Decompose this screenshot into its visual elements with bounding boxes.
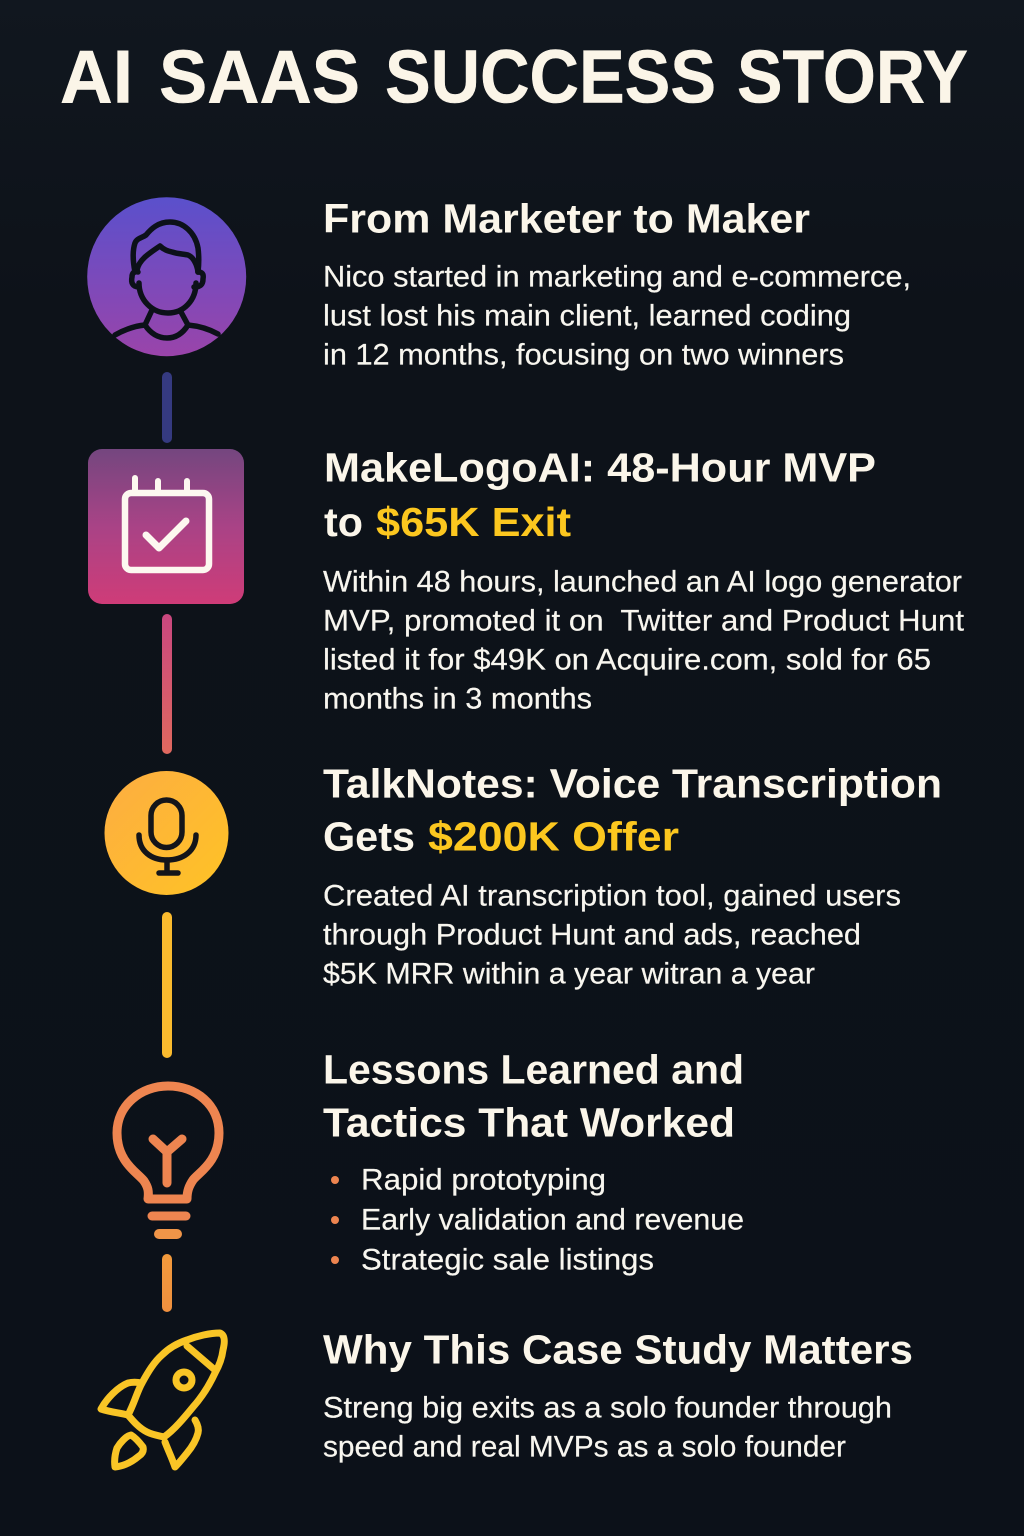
bullet list: Early validation and revenue xyxy=(361,1204,744,1237)
section: From Marketer to Maker xyxy=(323,196,911,372)
bullet list: Rapid prototyping xyxy=(361,1164,606,1197)
bullet list: Strategic sale listings xyxy=(361,1244,654,1277)
section: Why This Case Study Matters xyxy=(323,1326,913,1464)
heading: MakeLogoAI: 48-Hour MVP xyxy=(324,444,876,490)
heading: Lessons Learned and xyxy=(323,1046,744,1092)
body text: MVP, promoted it on Twitter and Product Hunt xyxy=(323,605,964,638)
body text xyxy=(323,1392,892,1464)
body text: in 12 months, focusing on two winners xyxy=(323,339,844,372)
bullet list xyxy=(331,1164,744,1277)
body text: lust lost his main client, learned coding xyxy=(323,300,851,333)
heading: Tactics That Worked xyxy=(323,1100,735,1146)
heading: $65K Exit xyxy=(376,499,571,545)
body text: speed and real MVPs as a solo founder xyxy=(323,1431,846,1464)
heading xyxy=(323,760,942,860)
body text xyxy=(323,261,911,372)
connector 4 xyxy=(162,1254,172,1312)
body text: months in 3 months xyxy=(323,683,592,716)
body text: through Product Hunt and ads, reached xyxy=(323,919,861,952)
icon: light bulb xyxy=(117,1086,219,1234)
body text: Within 48 hours, launched an AI logo generator xyxy=(323,566,962,599)
icon: person avatar xyxy=(87,197,246,356)
body text: Created AI transcription tool, gained users xyxy=(323,880,901,913)
connector 2 xyxy=(162,614,172,754)
heading xyxy=(324,444,876,545)
body text: Streng big exits as a solo founder through xyxy=(323,1392,892,1425)
body text: listed it for $49K on Acquire.com, sold for 65 xyxy=(323,644,931,677)
icon: calendar with check xyxy=(88,449,244,604)
connector 1 xyxy=(162,372,172,443)
heading: Gets xyxy=(323,814,415,860)
icon: rocket xyxy=(101,1333,224,1467)
heading: $200K Offer xyxy=(428,814,679,860)
section: MakeLogoAI xyxy=(323,444,964,716)
title: AI xyxy=(60,34,133,118)
heading: to xyxy=(324,499,363,545)
connector 3 xyxy=(162,912,172,1058)
title: SAAS xyxy=(159,34,360,118)
body text: $5K MRR within a year witran a year xyxy=(323,958,815,991)
section: TalkNotes xyxy=(323,760,942,991)
heading: TalkNotes: Voice Transcription xyxy=(323,760,942,806)
section: Lessons Learned xyxy=(323,1046,744,1277)
icon: microphone xyxy=(104,771,228,895)
body text xyxy=(323,880,901,991)
heading: Why This Case Study Matters xyxy=(323,1326,913,1372)
body text xyxy=(323,566,964,716)
title: STORY xyxy=(737,34,968,118)
body text: Nico started in marketing and e-commerce, xyxy=(323,261,911,294)
heading: From Marketer to Maker xyxy=(323,196,810,242)
title: SUCCESS xyxy=(385,34,716,118)
heading xyxy=(323,1046,744,1146)
title xyxy=(60,34,968,118)
